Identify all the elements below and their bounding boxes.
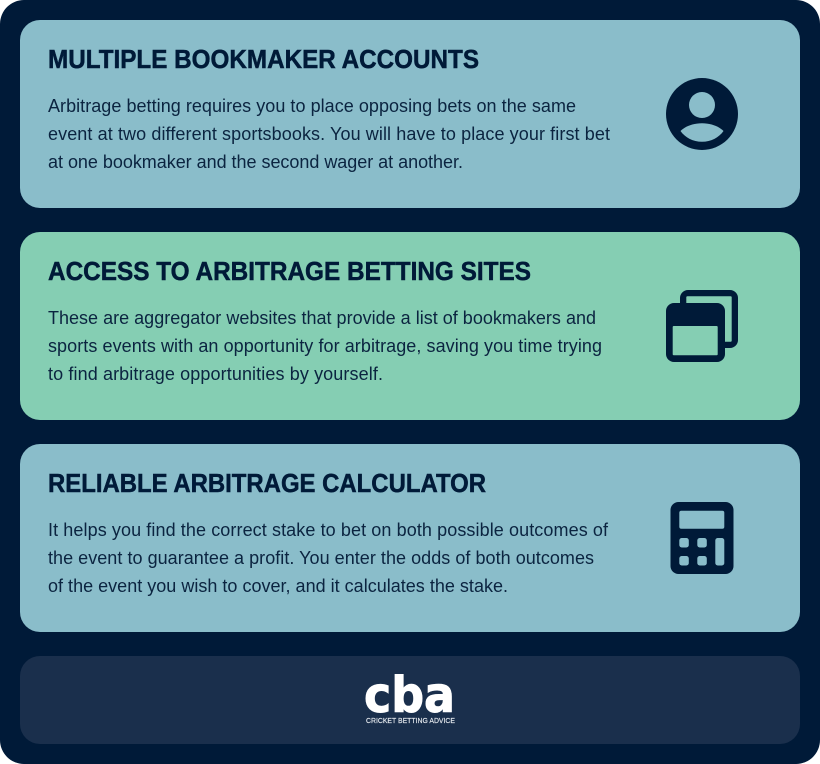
text block: calculator description: the event to guarantee a profit. You enter the odds of both outcomes <box>48 548 594 568</box>
icon: overlapping windows <box>666 290 738 362</box>
icon: user profile <box>666 78 738 150</box>
text block: bookmaker accounts description: at one bookmaker and the second wager at another. <box>48 152 463 172</box>
text block: calculator description: of the event you wish to cover, and it calculates the stake. <box>48 576 508 596</box>
text block: arbitrage sites description: sports events with an opportunity for arbitrage, saving you time trying <box>48 336 602 356</box>
text block: bookmaker accounts description <box>48 96 610 172</box>
heading: multiple bookmaker accounts: MULTIPLE BOOKMAKER ACCOUNTS <box>48 44 479 74</box>
panel: footer <box>20 656 800 744</box>
text block: bookmaker accounts description: event at two different sportsbooks. You will have to place your first bet <box>48 124 610 144</box>
logo: cricket betting advice: CRICKET BETTING ADVICE <box>366 718 455 725</box>
text block: arbitrage sites description <box>48 308 602 384</box>
text block: calculator description: It helps you find the correct stake to bet on both possible outcomes of <box>48 520 609 540</box>
panel: reliable arbitrage calculator <box>20 444 800 632</box>
text block: arbitrage sites description: to find arbitrage opportunities by yourself. <box>48 364 383 384</box>
heading: access to arbitrage betting sites: ACCESS TO ARBITRAGE BETTING SITES <box>48 256 531 286</box>
heading: reliable arbitrage calculator: RELIABLE ARBITRAGE CALCULATOR <box>48 468 486 498</box>
icon: calculator <box>670 502 734 574</box>
text block: arbitrage sites description: These are aggregator websites that provide a list of bookmakers and <box>48 308 596 328</box>
text block: bookmaker accounts description: Arbitrage betting requires you to place opposing bets on the same <box>48 96 576 116</box>
text block: calculator description <box>48 520 609 596</box>
panel: access to arbitrage betting sites <box>20 232 800 420</box>
panel: multiple bookmaker accounts <box>20 20 800 208</box>
logo: cricket betting advice: cba <box>364 667 455 724</box>
